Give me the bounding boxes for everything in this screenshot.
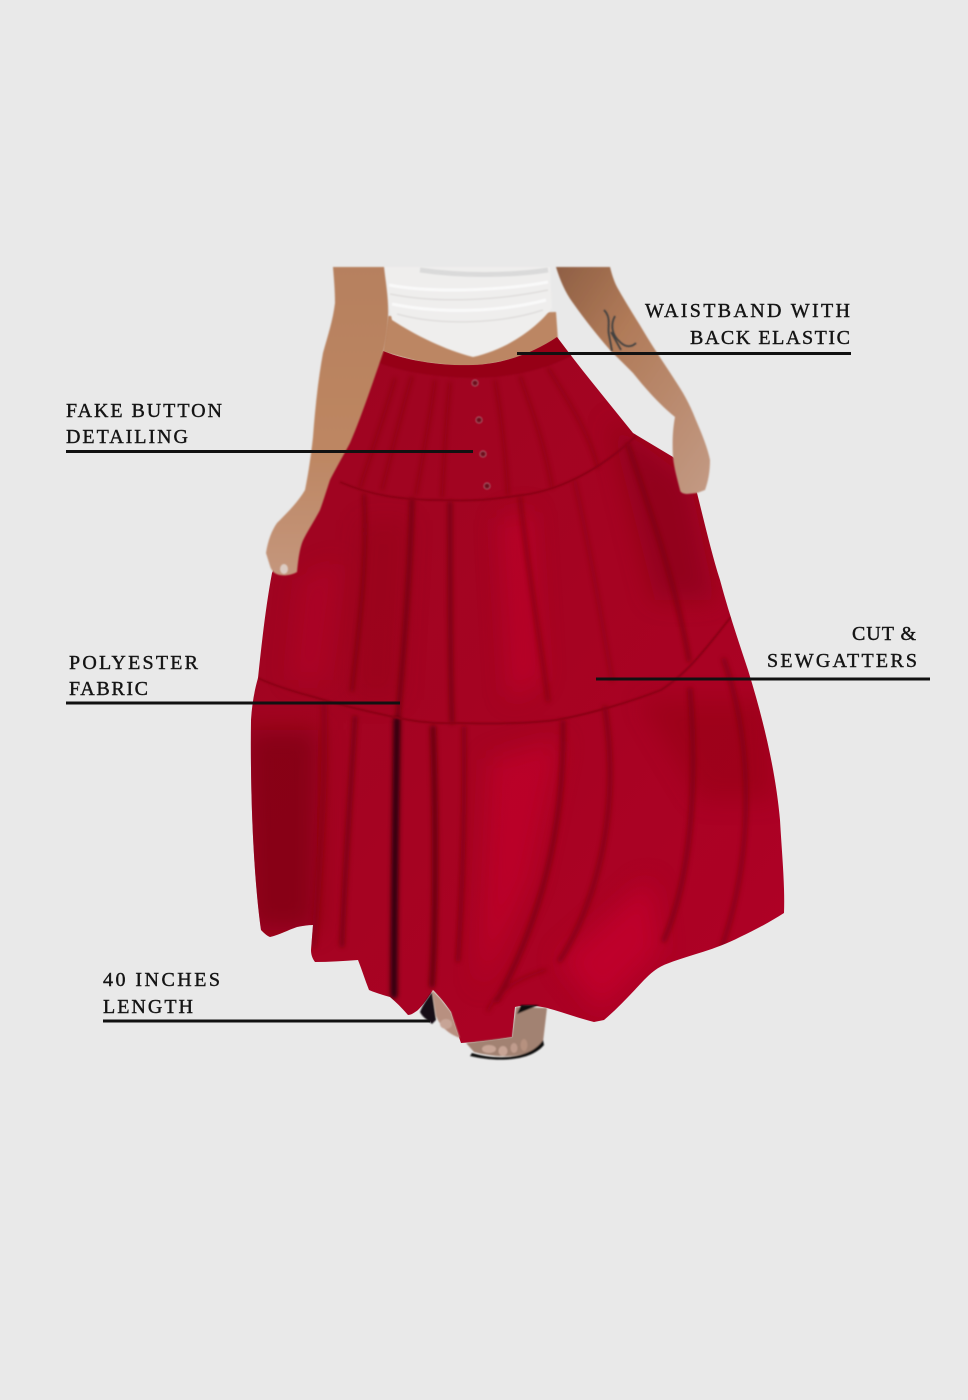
callout: cut and sew gatters: SEWGATTERS [767,650,919,672]
callout: 40 inches length: LENGTH [103,996,195,1018]
tier seams [258,436,731,724]
callout: waistband: WAISTBAND WITH [645,300,852,322]
callout: polyester fabric: FABRIC [69,678,150,700]
buttons [472,380,490,489]
callout: 40 inches length: 40 INCHES [103,969,222,991]
left thumb [280,564,288,574]
callout: fake button detailing: FAKE BUTTON [66,400,224,422]
callout: cut and sew gatters: CUT & [852,623,918,645]
callout: polyester fabric: POLYESTER [69,652,200,674]
sandals and feet [420,990,547,1060]
shading [245,420,775,930]
callout: waistband: BACK ELASTIC [690,327,852,349]
fold lines bottom tier [314,660,746,1010]
icon: arm tattoo [604,310,636,351]
left arm [266,267,388,575]
fold lines middle tier [352,445,689,722]
figure: model wearing skirt [240,267,800,1060]
callout: waistband [517,300,852,354]
callout: fake button detailing [66,400,473,452]
fold lines top tier [360,368,598,498]
callout: cut and sew gatters [596,623,930,679]
torso skin [383,312,558,368]
red tiered skirt [240,330,800,1060]
white crop top [384,267,552,357]
callout: 40 inches length [103,969,430,1021]
right arm and hand [556,267,710,494]
bright highlights [290,510,660,1010]
callout: fake button detailing: DETAILING [66,426,190,448]
waistband [376,337,572,378]
callout: polyester fabric [66,652,400,703]
